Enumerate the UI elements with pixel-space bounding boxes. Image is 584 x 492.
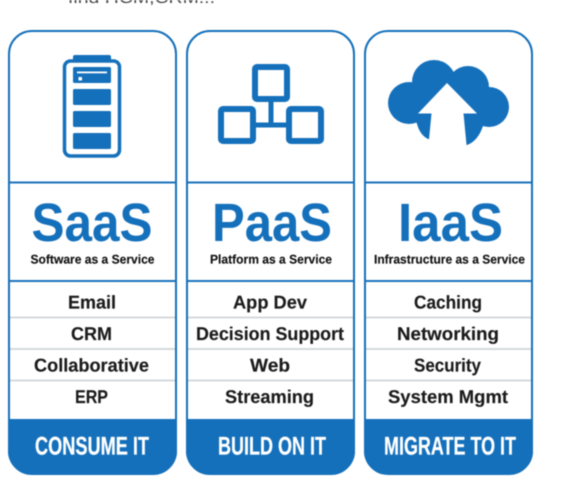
list: SaaS items: Email bbox=[68, 292, 116, 312]
list: PaaS items: Decision Support bbox=[196, 323, 344, 344]
icon: server battery bbox=[64, 55, 120, 156]
list: PaaS items: App Dev bbox=[233, 292, 308, 312]
list: IaaS items: System Mgmt bbox=[388, 386, 508, 407]
list: IaaS items: Caching bbox=[414, 292, 482, 312]
panel: SaaS bbox=[8, 31, 177, 474]
footer: consume it: CONSUME IT bbox=[35, 432, 149, 460]
panel: PaaS bbox=[186, 31, 355, 474]
heading: SaaS: SaaS bbox=[32, 193, 152, 253]
subtitle: SaaS: Software as a Service bbox=[30, 252, 155, 266]
list: SaaS items: ERP bbox=[75, 386, 108, 407]
icon: cloud upload bbox=[388, 60, 509, 150]
list: PaaS items: Web bbox=[250, 354, 290, 376]
subtitle: PaaS: Platform as a Service bbox=[210, 252, 332, 266]
list: SaaS items bbox=[34, 292, 149, 407]
list: IaaS items: Security bbox=[414, 354, 482, 376]
list: SaaS items: CRM bbox=[71, 323, 112, 344]
footer: build on it: BUILD ON IT bbox=[218, 432, 326, 460]
list: SaaS items: Collaborative bbox=[34, 354, 149, 376]
footer: migrate to it: MIGRATE TO IT bbox=[384, 432, 516, 460]
heading: PaaS: PaaS bbox=[212, 193, 332, 253]
heading: IaaS: IaaS bbox=[398, 193, 503, 253]
list: IaaS items: Networking bbox=[397, 323, 499, 344]
icon: network blocks bbox=[221, 67, 321, 141]
panel: IaaS bbox=[364, 31, 533, 474]
list: PaaS items bbox=[196, 292, 344, 407]
list: IaaS items bbox=[388, 292, 508, 407]
subtitle: IaaS: Infrastructure as a Service bbox=[374, 252, 525, 266]
list: PaaS items: Streaming bbox=[225, 386, 314, 407]
